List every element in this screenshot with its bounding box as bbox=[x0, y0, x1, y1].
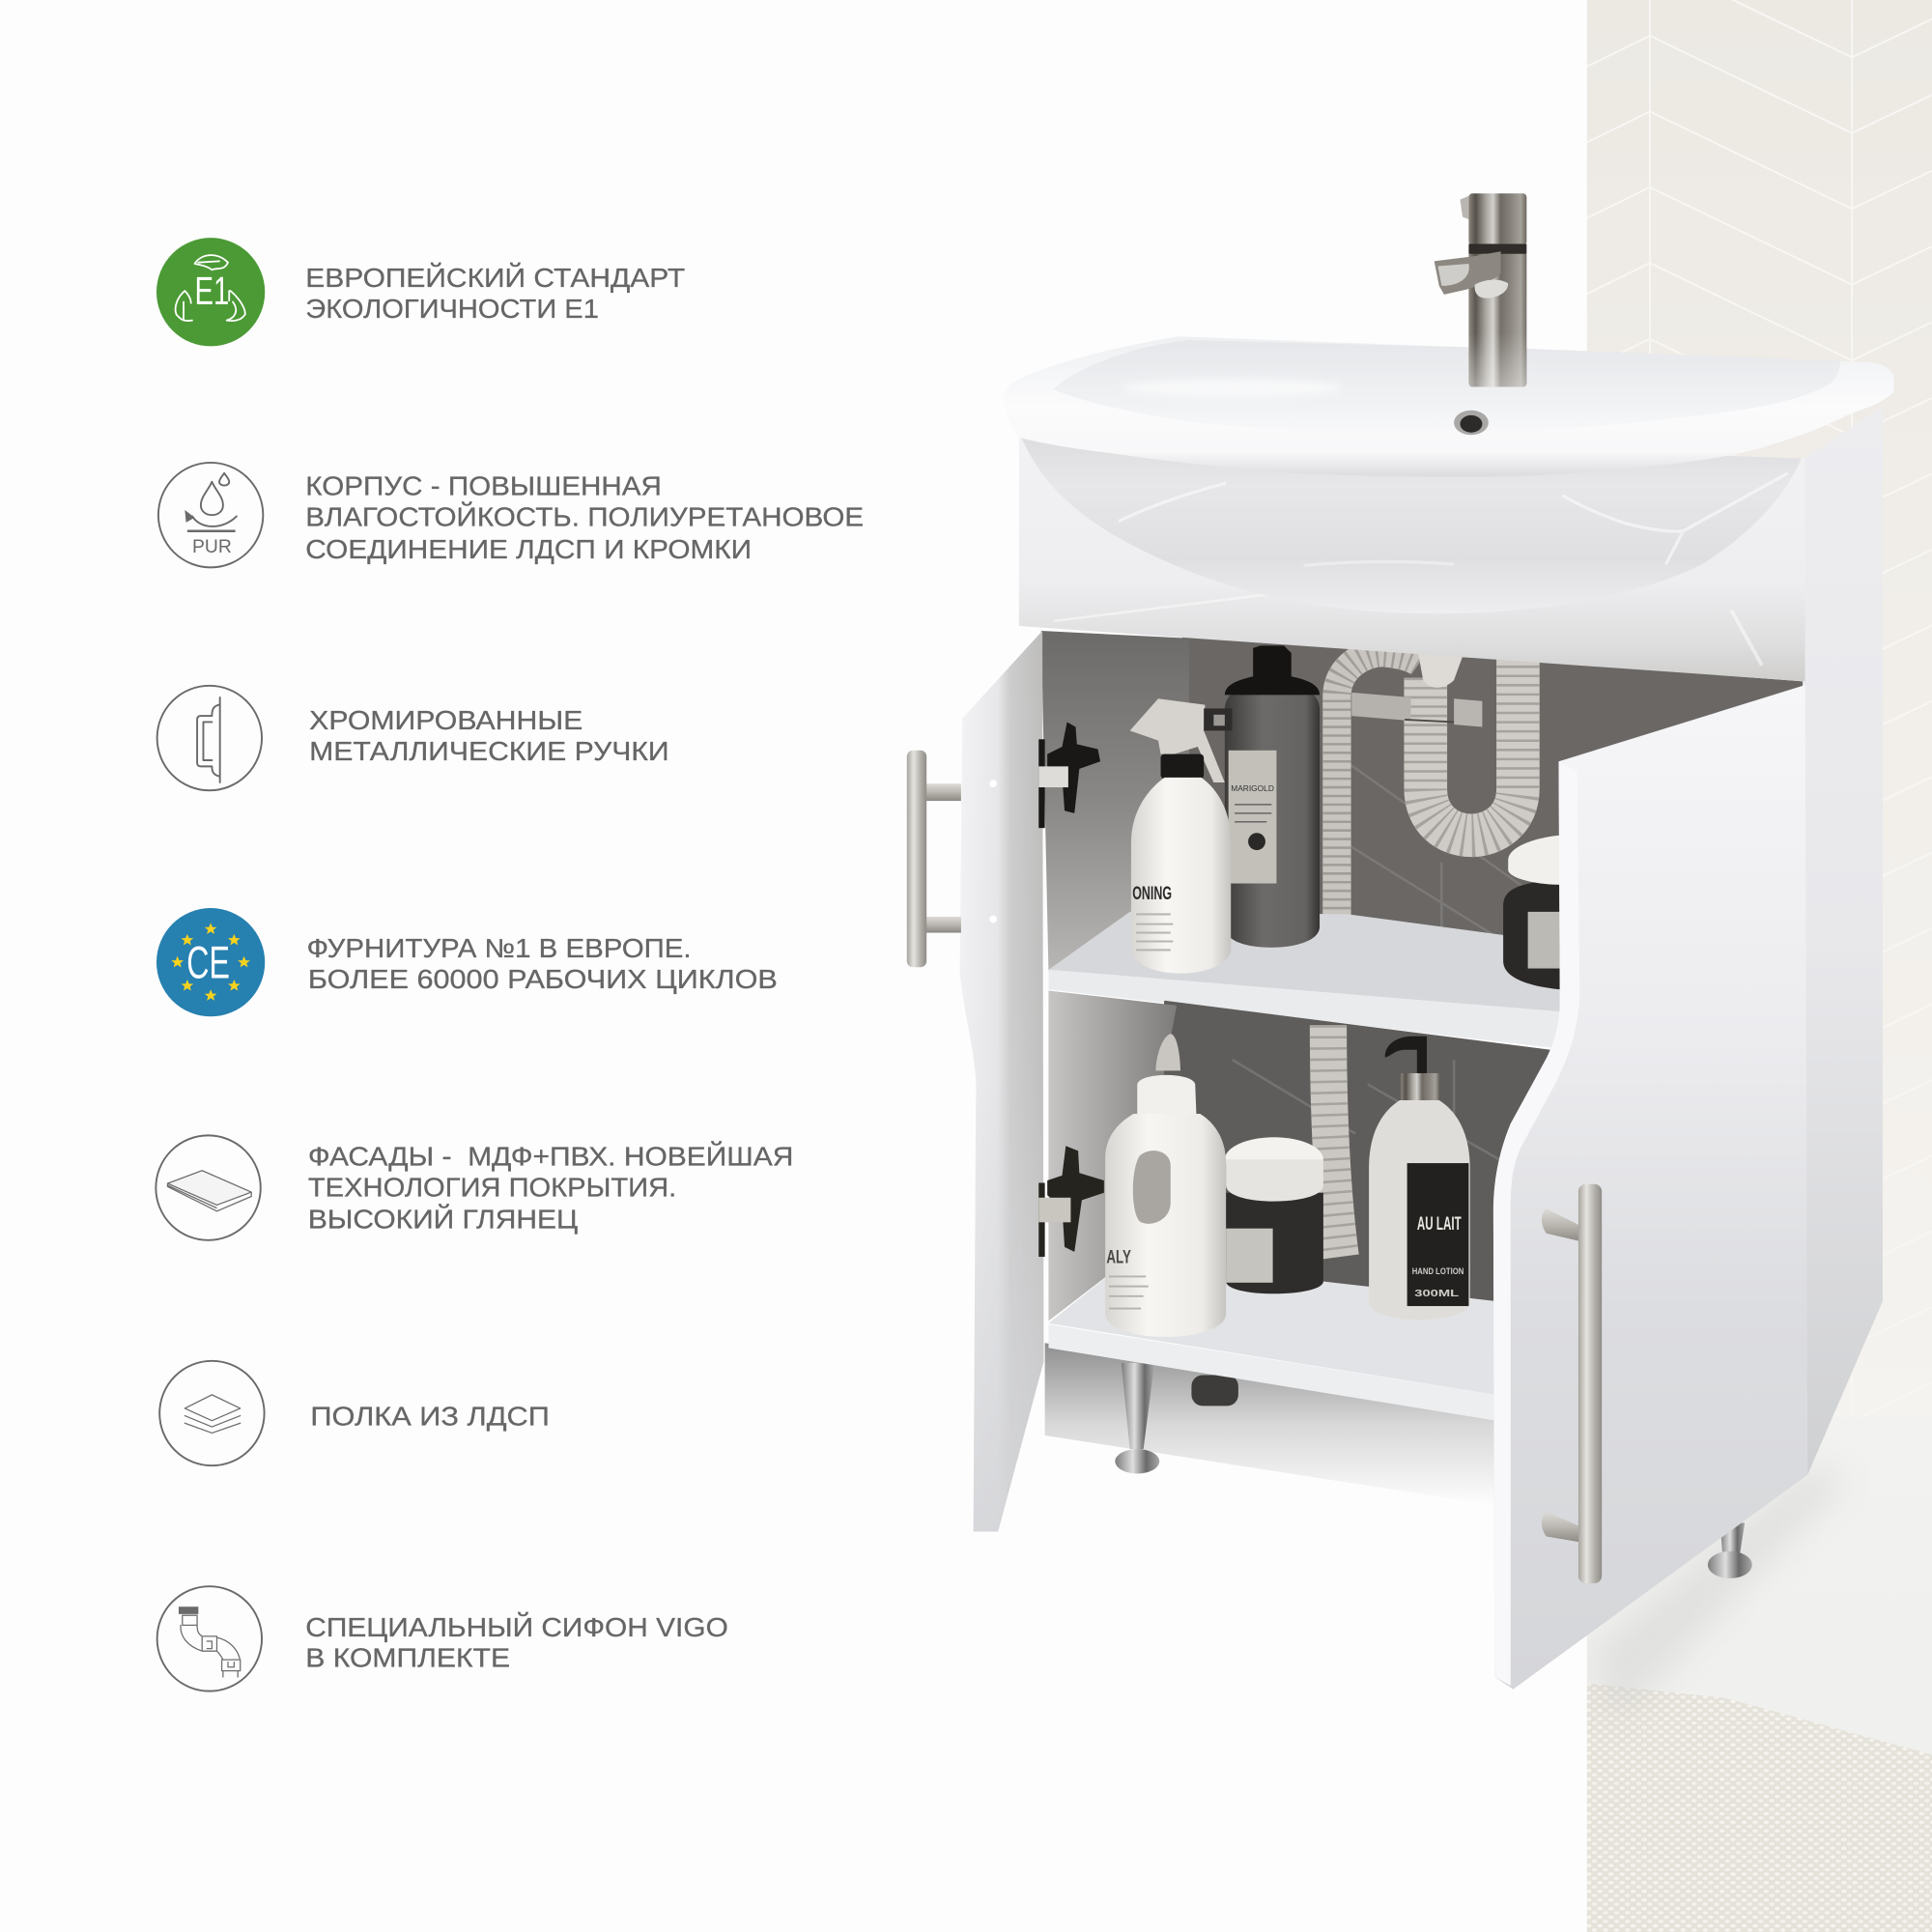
left door handle bbox=[907, 751, 961, 967]
feature 5: facades bbox=[156, 1135, 793, 1240]
feature 6: shelf bbox=[159, 1361, 550, 1465]
panel: left door bbox=[960, 631, 1043, 1531]
panel: bathroom interior background bbox=[1587, 0, 1932, 1932]
icon: siphon bbox=[157, 1586, 262, 1691]
feature 7: siphon bbox=[157, 1586, 728, 1691]
text: fittings: ФУРНИТУРА №1 В ЕВРОПЕ. bbox=[307, 933, 692, 963]
rim bbox=[1004, 336, 1893, 477]
text: PUR: КОРПУС - ПОВЫШЕННАЯ bbox=[305, 471, 662, 501]
panel: cabinet front under the basin bbox=[1019, 431, 1805, 681]
icon: E1 eco badge: E1 bbox=[195, 269, 229, 313]
feature 2: PUR bbox=[158, 463, 864, 567]
text: facades: ФАСАДЫ - МДФ+ПВХ. НОВЕЙШАЯ bbox=[308, 1142, 793, 1172]
siphon junction bbox=[1418, 653, 1463, 688]
text: handles bbox=[309, 705, 669, 766]
icon: E1 eco badge bbox=[156, 238, 265, 346]
back wall bbox=[1131, 635, 1803, 974]
wall bracket bbox=[1351, 693, 1482, 727]
icon: CE badge: CE bbox=[186, 938, 230, 989]
detergent bottle: ALY bbox=[1106, 1247, 1131, 1267]
left inner wall bbox=[1041, 631, 1189, 974]
shadow of the open door on the floor bbox=[1598, 1474, 1829, 1706]
soap bottle: HAND LOTION bbox=[1412, 1266, 1463, 1276]
icon: water drop PUR: PUR bbox=[192, 536, 232, 557]
bottom shelf bbox=[1048, 1260, 1495, 1395]
back wall bbox=[1127, 1001, 1560, 1306]
upper hinge bbox=[1038, 722, 1100, 828]
tiled wall bbox=[1587, 0, 1932, 1430]
soap bottle bbox=[1369, 1037, 1470, 1320]
bowl highlights bbox=[1119, 473, 1788, 565]
drain hose, lower strand bbox=[1328, 1025, 1341, 1257]
text: E1: ЕВРОПЕЙСКИЙ СТАНДАРТ bbox=[305, 263, 685, 293]
icon: facade board bbox=[156, 1135, 261, 1240]
basin bbox=[1004, 336, 1893, 613]
dark bottle: MARIGOLD bbox=[1231, 783, 1274, 793]
dark bottle bbox=[1225, 645, 1320, 948]
spray bottle bbox=[1130, 698, 1233, 974]
text: E1 bbox=[305, 263, 685, 324]
basin inner highlight bbox=[1122, 379, 1343, 398]
feature 1: E1 standard bbox=[156, 238, 685, 346]
faucet bbox=[1435, 193, 1526, 387]
panel: right door bbox=[1493, 685, 1807, 1690]
bowl underside bbox=[1019, 431, 1802, 613]
text: fittings bbox=[307, 933, 778, 994]
icon: water drop PUR bbox=[158, 463, 263, 567]
shadow below the cabinet bbox=[1045, 1343, 1497, 1506]
text: handles: МЕТАЛЛИЧЕСКИЕ РУЧКИ bbox=[309, 736, 669, 766]
soap bottle: 300ML bbox=[1414, 1289, 1459, 1299]
text: PUR bbox=[305, 471, 864, 564]
bath mat bbox=[1587, 1683, 1932, 1932]
panel: cabinet interior, lower section bbox=[1048, 991, 1560, 1421]
text: facades: ВЫСОКИЙ ГЛЯНЕЦ bbox=[308, 1205, 578, 1235]
drain hose bbox=[1337, 653, 1518, 918]
icon: stacked layers bbox=[159, 1361, 265, 1465]
floor bbox=[1587, 1417, 1932, 1932]
drain hole bbox=[1454, 411, 1489, 435]
panel: cabinet interior, upper section bbox=[1041, 631, 1803, 974]
feature 4: fittings bbox=[156, 908, 778, 1016]
soap bottle: AU LAIT bbox=[1417, 1214, 1462, 1235]
text: PUR: СОЕДИНЕНИЕ ЛДСП И КРОМКИ bbox=[305, 534, 752, 564]
jar on bottom shelf bbox=[1225, 1137, 1323, 1293]
feature 3: handles bbox=[157, 686, 669, 790]
text: siphon: СПЕЦИАЛЬНЫЙ СИФОН VIGO bbox=[305, 1612, 728, 1642]
upper shelf bbox=[1048, 912, 1560, 1048]
text: facades bbox=[308, 1142, 793, 1235]
text: handles: ХРОМИРОВАННЫЕ bbox=[309, 705, 582, 735]
left inner wall bbox=[1048, 991, 1177, 1321]
jar on upper shelf bbox=[1503, 836, 1560, 989]
text: siphon: В КОМПЛЕКТЕ bbox=[305, 1643, 510, 1673]
cabinet side panel bbox=[1799, 407, 1883, 1475]
text: siphon bbox=[305, 1612, 728, 1673]
cabinet feet and drain bbox=[1115, 1363, 1752, 1578]
text: PUR: ВЛАГОСТОЙКОСТЬ. ПОЛИУРЕТАНОВОЕ bbox=[305, 502, 864, 532]
detergent bottle bbox=[1105, 1034, 1226, 1337]
text: fittings: БОЛЕЕ 60000 РАБОЧИХ ЦИКЛОВ bbox=[308, 964, 778, 994]
lower hinge bbox=[1038, 1146, 1104, 1257]
icon: CE badge bbox=[156, 908, 265, 1016]
text: E1: ЭКОЛОГИЧНОСТИ Е1 bbox=[305, 294, 599, 324]
inner basin bbox=[1054, 340, 1841, 433]
icon: handle bbox=[157, 686, 262, 790]
text: facades: ТЕХНОЛОГИЯ ПОКРЫТИЯ. bbox=[308, 1173, 676, 1203]
spray bottle: ONING bbox=[1132, 884, 1172, 904]
text: shelf: ПОЛКА ИЗ ЛДСП bbox=[310, 1402, 550, 1432]
right door handle bbox=[1542, 1184, 1602, 1583]
